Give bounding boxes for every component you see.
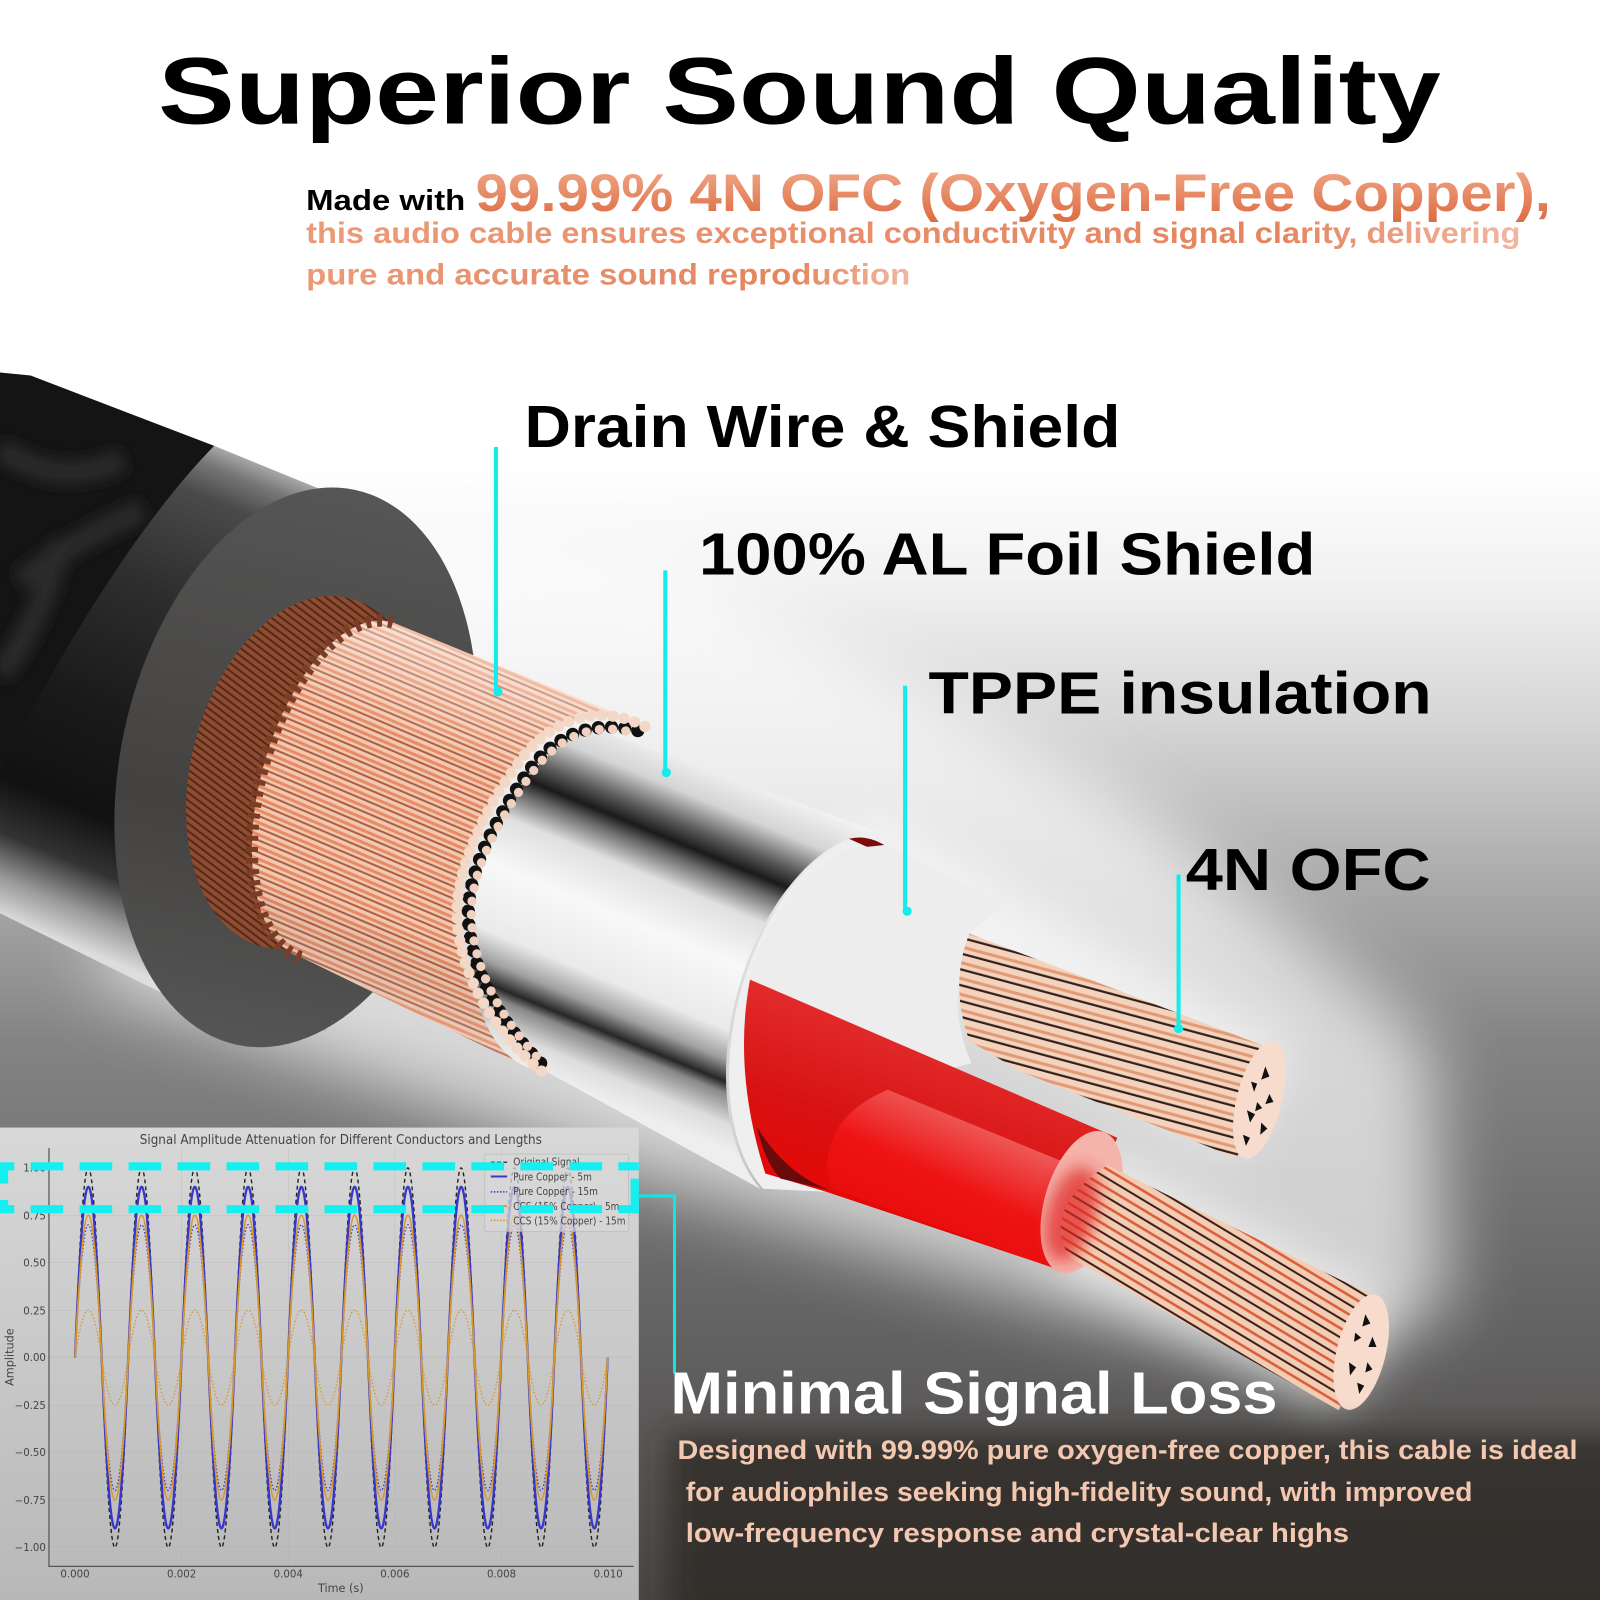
outer braid	[0, 372, 214, 776]
shield strand end rim	[457, 715, 645, 1074]
dark backdrop for signal loss text	[668, 1434, 1600, 1600]
signal loss line one: Designed with 99.99% pure oxygen-free copper, this cable is ideal	[678, 1435, 1578, 1465]
intro line three: pure and accurate sound reproduction	[306, 259, 910, 292]
y axis tick labels: −0.75	[15, 1496, 46, 1507]
intro lead-in: Made with	[306, 185, 465, 217]
chart legend: CCS (15% Copper) - 5m	[513, 1202, 619, 1213]
y axis tick labels: 0.50	[23, 1258, 46, 1269]
aluminium foil shield	[471, 730, 878, 1189]
drain wire leader	[493, 447, 503, 696]
lower copper conductor	[1034, 1160, 1399, 1415]
white insulation tube rim	[729, 832, 880, 1192]
red insulation interior	[744, 980, 1117, 1270]
signal loss line three: low-frequency response and crystal-clear highs	[686, 1518, 1349, 1548]
copper shield strands	[252, 621, 648, 1077]
chart legend: CCS (15% Copper) - 15m	[513, 1216, 626, 1227]
TPPE leader	[903, 686, 912, 916]
white insulated conductor	[748, 845, 1005, 1071]
signal waves	[75, 1168, 608, 1547]
outer jacket	[0, 446, 347, 1044]
chart title: Signal Amplitude Attenuation for Different Conductors and Lengths	[140, 1133, 542, 1148]
x axis tick labels: 0.010	[594, 1570, 623, 1581]
red insulation sleeve	[827, 1090, 1092, 1270]
red sleeve end	[1025, 1121, 1138, 1283]
jacket end face	[65, 453, 527, 1081]
x axis tick labels: 0.002	[167, 1570, 196, 1581]
4N OFC label: 4N OFC	[1186, 836, 1431, 903]
intro text block	[306, 164, 1551, 292]
dark tube interior	[849, 838, 908, 865]
4N OFC leader	[1174, 874, 1183, 1033]
upper copper conductor	[959, 934, 1296, 1164]
foil shield leader	[662, 570, 671, 777]
signal loss heading: Minimal Signal Loss	[670, 1359, 1278, 1426]
x axis tick labels: 0.008	[487, 1570, 516, 1581]
y axis tick labels: 0.75	[23, 1211, 46, 1222]
intro line two: this audio cable ensures exceptional conductivity and signal clarity, delivering	[306, 217, 1520, 250]
x axis tick labels: 0.004	[274, 1570, 303, 1581]
foil shield label: 100% AL Foil Shield	[699, 520, 1315, 587]
x axis title: Time (s)	[317, 1582, 364, 1595]
chart panel	[0, 1128, 639, 1600]
signal attenuation chart	[0, 1128, 639, 1600]
chart legend: Original Signal	[513, 1157, 580, 1168]
connector from chart to signal loss heading	[638, 1196, 674, 1373]
y axis tick labels: 0.00	[23, 1353, 46, 1364]
x axis tick labels: 0.006	[380, 1570, 409, 1581]
signal loss section	[670, 1359, 1578, 1548]
y axis title: Amplitude	[3, 1328, 16, 1386]
title: Superior Sound Quality	[158, 38, 1441, 144]
dark lower tube crescent	[757, 1128, 829, 1190]
cyan dashed highlight box	[0, 1166, 639, 1213]
halo around conductors	[837, 867, 1367, 1357]
callout: drain wire and shield	[493, 393, 1120, 696]
cable cross-section illustration	[0, 372, 1399, 1415]
TPPE label: TPPE insulation	[929, 659, 1432, 726]
y axis tick labels: −1.00	[15, 1543, 46, 1554]
white glow behind cable	[92, 510, 1449, 1367]
chart legend: Pure Copper - 5m	[513, 1173, 592, 1184]
drain wire label: Drain Wire & Shield	[524, 393, 1120, 460]
y axis tick labels	[15, 1163, 46, 1554]
callout: 4N OFC	[1174, 836, 1431, 1033]
chart legend	[485, 1154, 629, 1232]
callout: TPPE insulation	[903, 659, 1432, 916]
chart legend: Pure Copper - 15m	[513, 1187, 598, 1198]
x axis tick labels	[60, 1570, 623, 1581]
y axis tick labels: 1.00	[23, 1163, 46, 1174]
callout: foil shield	[662, 520, 1315, 777]
x axis tick labels: 0.000	[60, 1570, 90, 1581]
y axis tick labels: −0.25	[15, 1401, 46, 1412]
intro highlight: 99.99% 4N OFC (Oxygen-Free Copper),	[476, 164, 1551, 223]
y axis tick labels: −0.50	[15, 1448, 46, 1459]
copper shield base	[151, 570, 461, 975]
y axis tick labels: 0.25	[23, 1306, 46, 1317]
chart grid	[49, 1148, 634, 1566]
chart axes	[49, 1148, 634, 1566]
signal loss line two: for audiophiles seeking high-fidelity sound, with improved	[686, 1477, 1472, 1507]
